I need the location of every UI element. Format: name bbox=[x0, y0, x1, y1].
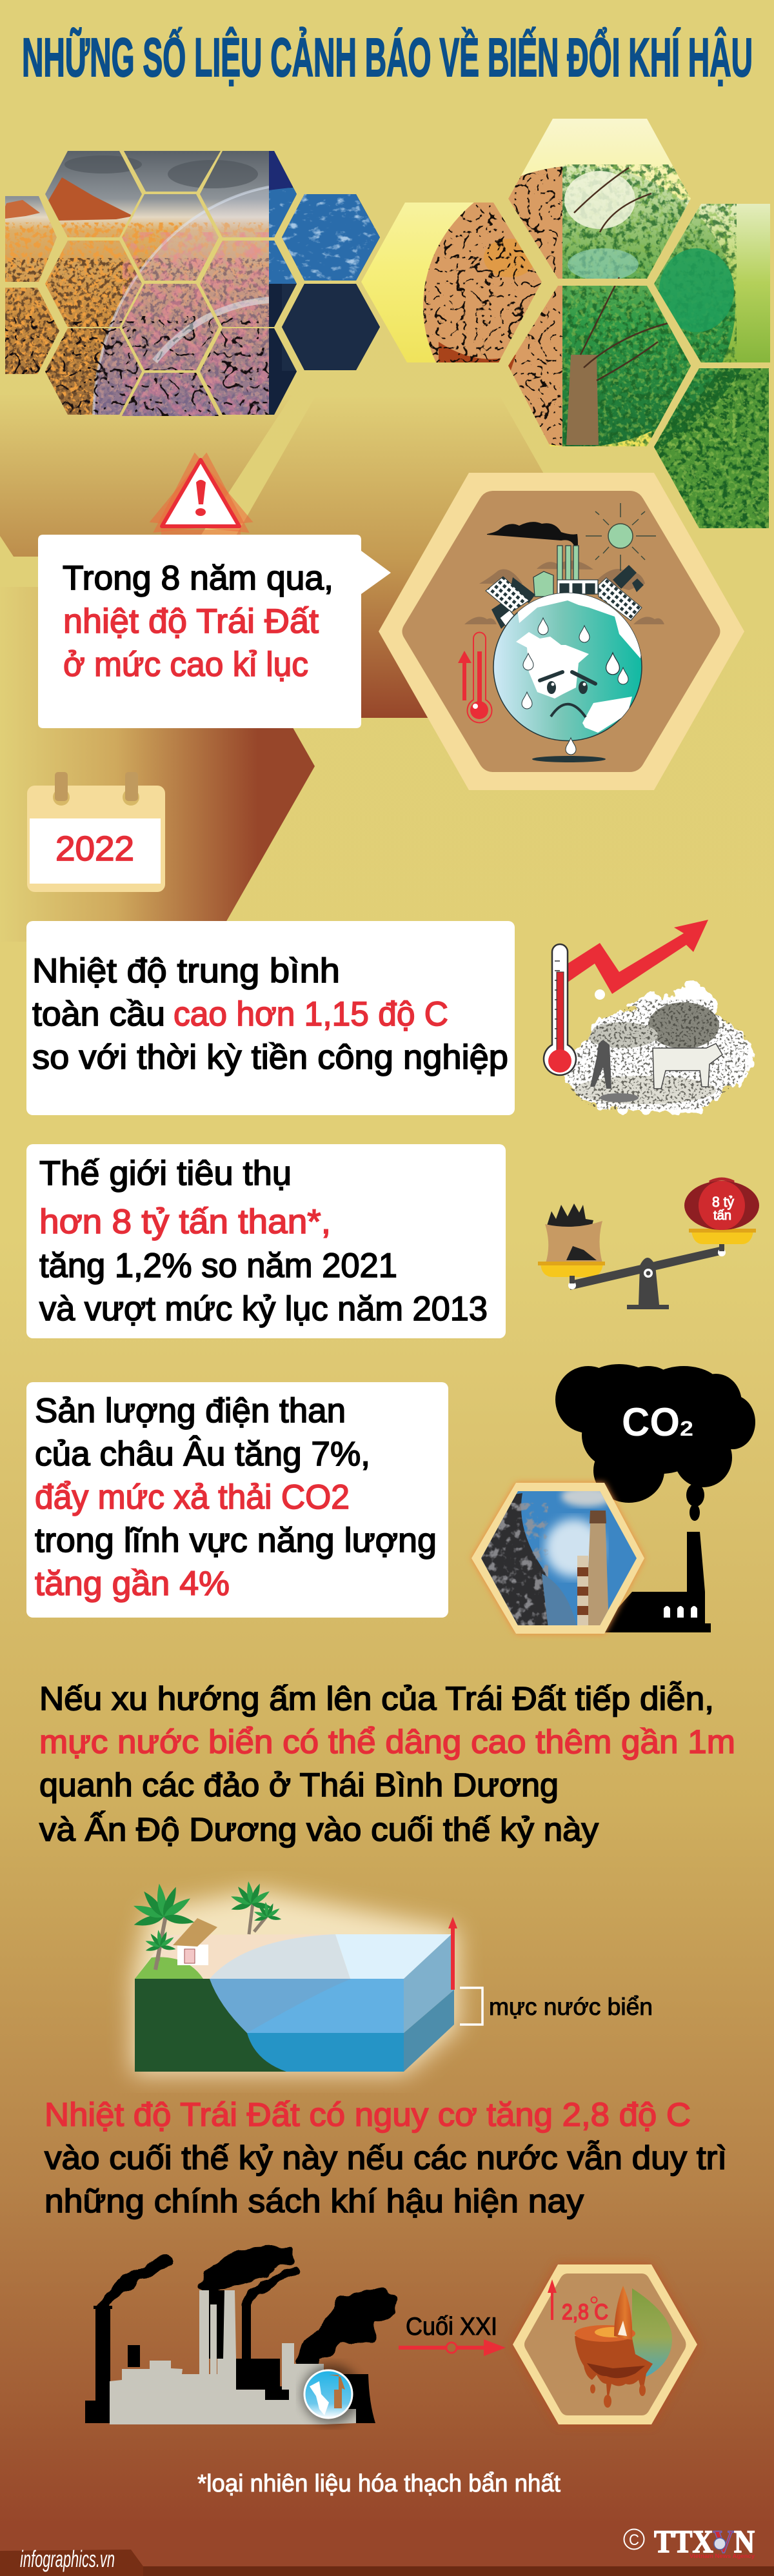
temperature arrow bbox=[548, 2279, 557, 2320]
icon: city right bbox=[599, 565, 644, 620]
footer band: infographics.vn bbox=[20, 2546, 115, 2572]
icon: CO2 cloud: 2 bbox=[680, 1417, 693, 1440]
footer band bbox=[0, 2546, 774, 2576]
panel: coal consumption: và vượt mức kỷ lục năm 2013 bbox=[39, 1290, 488, 1328]
icon: thermometer bbox=[544, 944, 576, 1075]
icon: rising red arrow bbox=[568, 920, 708, 994]
panel: sad earth hexagon bbox=[379, 473, 744, 790]
icon: smog clouds bbox=[464, 560, 664, 624]
footnote: *loại nhiên liệu hóa thạch bẩn nhất bbox=[197, 2470, 561, 2497]
text block: sea level: Nếu xu hướng ấm lên của Trái Đất tiếp diễn, bbox=[39, 1680, 714, 1717]
palm trees bbox=[132, 1881, 282, 1970]
panel: european coal power: đẩy mức xả thải CO2 bbox=[35, 1478, 350, 1516]
logo: TTXVN: TTXVN bbox=[654, 2523, 755, 2559]
photo collage: drought and planet hexagons bbox=[5, 151, 380, 416]
panel: global temperature: toàn cầu bbox=[32, 995, 165, 1033]
front face water bbox=[210, 1979, 404, 2033]
callout: record temperature: ở mức cao kỉ lục bbox=[63, 646, 308, 684]
icon: calendar 2022 bbox=[27, 772, 165, 892]
illustration: rising sea level block bbox=[132, 1881, 482, 2074]
panel: european coal power bbox=[26, 1382, 448, 1618]
label: end of 21st century: Cuối XXI bbox=[406, 2313, 497, 2341]
icon: factory smoke bbox=[487, 522, 578, 546]
text block: sea level: quanh các đảo ở Thái Bình Dương bbox=[39, 1767, 559, 1803]
panel: coal consumption: hơn 8 tỷ tấn than*, bbox=[39, 1203, 331, 1241]
icon: sun bbox=[586, 503, 656, 571]
icon: pre-industrial farming etching bbox=[564, 983, 753, 1113]
panel: european coal power: trong lĩnh vực năng lượng bbox=[35, 1521, 437, 1560]
icon: city left bbox=[486, 577, 535, 629]
icon: thermometer with rising arrow bbox=[458, 632, 492, 722]
grey factory building bbox=[110, 2290, 356, 2424]
icon: balance scale with coal and weight: 8 tỷ bbox=[712, 1194, 734, 1210]
icon: calendar 2022: 2022 bbox=[55, 829, 134, 868]
warning icon bbox=[145, 447, 257, 539]
icon: balance scale with coal and weight: tấn bbox=[713, 1209, 731, 1223]
panel: coal consumption: tăng 1,2% so năm 2021 bbox=[39, 1247, 397, 1285]
label: sea level: mực nước biển bbox=[489, 1994, 653, 2020]
panel: global temperature: so với thời kỳ tiền công nghiệp bbox=[32, 1038, 508, 1076]
logo: TTXVN: C bbox=[629, 2531, 639, 2549]
callout: record temperature: Trong 8 năm qua, bbox=[63, 559, 333, 597]
panel: global temperature bbox=[26, 921, 515, 1115]
panel: global temperature: cao hơn 1,15 độ C bbox=[174, 995, 448, 1033]
panel: coal consumption bbox=[26, 1144, 506, 1338]
icon: balance scale with coal and weight bbox=[538, 1179, 759, 1309]
text block: 2.8 degree warning: Nhiệt độ Trái Đất có nguy cơ tăng 2,8 độ C bbox=[45, 2096, 691, 2133]
text block: sea level: và Ấn Độ Dương vào cuối thế kỷ này bbox=[39, 1810, 599, 1848]
background hexagon: lower left bbox=[0, 587, 315, 942]
background hexagon: centre bbox=[206, 397, 591, 718]
melting earth bbox=[575, 2286, 672, 2408]
illustration: polluting factory bbox=[85, 2250, 393, 2424]
right side bbox=[404, 1934, 454, 2033]
panel: coal consumption: Thế giới tiêu thụ bbox=[39, 1154, 292, 1193]
panel: european coal power: của châu Âu tăng 7%, bbox=[35, 1435, 370, 1473]
island top bbox=[135, 1934, 335, 1979]
red arrow bbox=[448, 1917, 457, 1990]
icon: CO2 cloud bbox=[555, 1364, 755, 1521]
text block: 2.8 degree warning: những chính sách khí hậu hiện nay bbox=[45, 2183, 584, 2219]
panel: melting earth hexagon bbox=[513, 2264, 697, 2424]
text block: 2.8 degree warning bbox=[45, 2096, 727, 2219]
text block: sea level: mực nước biển có thể dâng cao thêm gần 1m bbox=[39, 1723, 735, 1760]
logo: TTXVN: Vietnam News Agency bbox=[690, 2553, 755, 2559]
mini earth bbox=[302, 2364, 361, 2424]
background hexagon: upper left bbox=[0, 395, 292, 557]
callout: record temperature bbox=[38, 535, 391, 728]
smoke bbox=[102, 2250, 393, 2363]
coal pile bbox=[547, 1204, 593, 1232]
panel: global temperature: Nhiệt độ trung bình bbox=[32, 952, 340, 990]
panel: european coal power: tăng gần 4% bbox=[35, 1565, 230, 1603]
icon: CO2 cloud: CO bbox=[622, 1400, 680, 1445]
icon: chimneys bbox=[533, 546, 598, 597]
callout: record temperature: nhiệt độ Trái Đất bbox=[63, 602, 319, 640]
photo hexagon: coal and power plant bbox=[471, 1483, 644, 1634]
red weight bbox=[711, 1179, 733, 1192]
text block: sea level bbox=[39, 1680, 735, 1848]
text block: 2.8 degree warning: vào cuối thế kỷ này nếu các nước vẫn duy trì bbox=[45, 2139, 727, 2176]
black stacks and buildings bbox=[85, 2290, 375, 2423]
icon: factory silhouette bbox=[604, 1532, 711, 1632]
temperature label: 2,8 C bbox=[562, 2300, 608, 2324]
icon: sad earth bbox=[493, 580, 645, 762]
coal sack bbox=[545, 1221, 602, 1263]
level bracket bbox=[460, 1988, 482, 2025]
panel: european coal power: Sản lượng điện than bbox=[35, 1392, 346, 1430]
house bbox=[173, 1918, 217, 1965]
photo collage: cracked earth to green forest bbox=[358, 116, 774, 533]
front face land bbox=[135, 1979, 404, 2072]
arrow bbox=[399, 2339, 506, 2356]
